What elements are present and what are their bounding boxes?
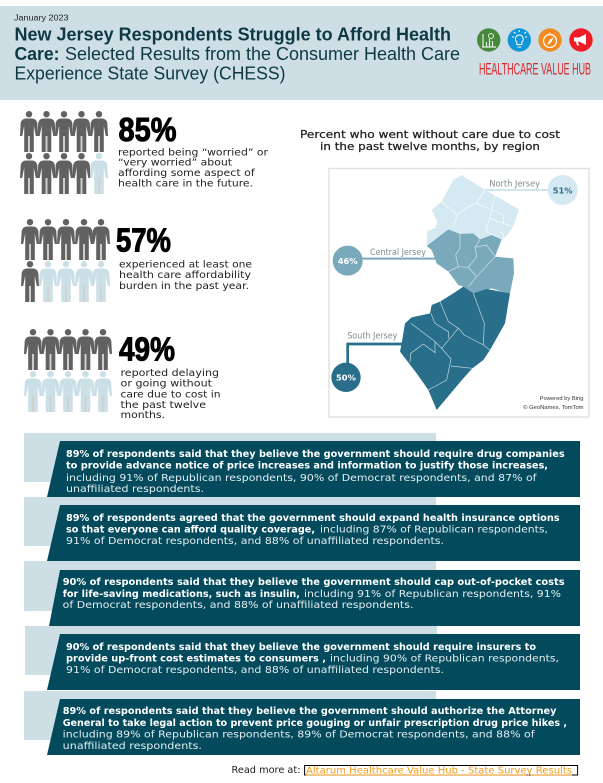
description: [119, 260, 252, 292]
panel: 49 percent stat: [24, 329, 220, 421]
description: “very worried” about: [118, 158, 232, 169]
icon: megaphone: [569, 28, 593, 52]
panel: 85 percent stat: [20, 111, 269, 194]
description: [118, 148, 269, 190]
panel: cost estimates finding: 91% of Democrat respondents, and 88% of unaffiliated respondents.: [66, 665, 444, 676]
panel: drug price notice finding: including 91% of Republican respondents, 90% of Democrat respondents, and 87% of: [66, 473, 537, 484]
description: [120, 368, 220, 421]
description: experienced at least one: [119, 260, 252, 271]
map heading: Percent who went without care due to cost: [300, 128, 561, 141]
title: Selected Results from the Consumer Health Care: [65, 43, 460, 64]
description: health care affordability: [119, 270, 251, 281]
map region: North Jersey: [427, 175, 519, 246]
map attribution: Powered by Bing: [540, 396, 584, 402]
panel: expand coverage finding: so that everyone can afford quality coverage,: [66, 525, 315, 536]
pictogram: 9 of 10 people: [20, 111, 108, 194]
panel: expand coverage finding: 91% of Democrat respondents, and 88% of unaffiliated respondents.: [66, 536, 444, 547]
read more link: Read more at:: [232, 765, 300, 776]
panel: expand coverage finding: including 87% of Republican respondents,: [320, 525, 548, 536]
map attribution: [523, 396, 584, 411]
panel: drug price notice finding: unaffiliated respondents.: [66, 484, 204, 495]
panel: insulin cost cap finding: for life-saving medications, such as insulin,: [63, 589, 300, 600]
panel: insulin cost cap finding: 90% of respondents said that they believe the government should cap out-of-pocket costs: [63, 577, 565, 588]
description: burden in the past year.: [119, 281, 249, 292]
map region: Central Jersey: [427, 229, 514, 294]
callout: North Jersey 51%: North Jersey: [489, 180, 540, 190]
date: January 2023: [14, 14, 69, 22]
callout: South Jersey 50%: 50%: [336, 373, 357, 383]
panel: drug price notice finding: to provide advance notice of price increases and information to justify those increases,: [66, 460, 548, 472]
callout: Central Jersey 46%: 46%: [338, 256, 358, 266]
callout: South Jersey 50%: South Jersey: [347, 332, 397, 342]
panel: insulin cost cap finding: including 91% of Republican respondents, 91%: [304, 589, 561, 600]
description: health care in the future.: [118, 179, 253, 190]
title: Care:: [14, 43, 60, 64]
description: care due to cost in: [120, 389, 220, 400]
callout: Central Jersey 46%: [333, 246, 437, 276]
description: the past twelve: [120, 400, 206, 411]
description: reported delaying: [120, 368, 219, 379]
description: affording some aspect of: [118, 168, 255, 179]
panel: price gouging finding: [24, 691, 580, 755]
panel: price gouging finding: including 89% of Republican respondents, 89% of Democrat respondents, and 88% of: [63, 730, 535, 741]
read more link: [232, 765, 578, 776]
panel: price gouging finding: General to take legal action to prevent price gouging or unfair prescription drug price hikes ,: [63, 718, 567, 729]
map attribution: © GeoNames, TomTom: [523, 404, 584, 411]
panel: expand coverage finding: [24, 497, 580, 561]
callout: South Jersey 50%: [331, 332, 403, 392]
map heading: [300, 128, 561, 153]
title: [14, 24, 460, 83]
panel: insulin cost cap finding: of Democrat respondents, and 88% of unaffiliated respondents.: [63, 600, 414, 611]
panel: cost estimates finding: [25, 626, 580, 690]
header band: [0, 6, 603, 100]
read more link: Altarum Healthcare Value Hub - State Survey Results: [306, 766, 572, 776]
panel: New Jersey region map: [329, 168, 589, 417]
figure: 85%: 85%: [118, 111, 176, 148]
map heading: in the past twelve months, by region: [320, 140, 540, 153]
callout: Central Jersey 46%: Central Jersey: [370, 248, 426, 258]
panel: cost estimates finding: provide up-front cost estimates to consumers ,: [66, 654, 326, 665]
figure: 57%: 57%: [116, 222, 171, 259]
title: New Jersey Respondents Struggle to Afford Health: [14, 24, 451, 45]
icon: light bulb: [508, 28, 531, 52]
panel: drug price notice finding: 89% of respondents said that they believe the government should require drug companies: [66, 449, 565, 460]
panel: cost estimates finding: 90% of respondents said that they believe the government should require insurers to: [66, 642, 536, 653]
title: Experience State Survey (CHESS): [14, 62, 286, 83]
panel: drug price notice finding: [24, 433, 580, 497]
panel: insulin cost cap finding: [24, 561, 580, 626]
callout: North Jersey 51%: 51%: [553, 185, 573, 195]
panel: cost estimates finding: including 90% of Republican respondents,: [330, 654, 559, 665]
description: reported being “worried” or: [118, 148, 269, 159]
description: or going without: [120, 379, 212, 390]
panel: expand coverage finding: 89% of respondents agreed that the government should expand health insurance options: [66, 513, 560, 524]
panel: price gouging finding: unaffiliated respondents.: [63, 741, 202, 752]
callout: North Jersey 51%: [485, 175, 578, 205]
icon: compass: [538, 28, 562, 52]
logo: Healthcare Value Hub: [477, 28, 593, 78]
pictogram: 6 of 10 people: [21, 219, 110, 302]
description: months.: [120, 410, 165, 421]
map region: South Jersey: [400, 287, 510, 410]
figure: 49%: 49%: [119, 331, 175, 368]
panel: 57 percent stat: [21, 219, 252, 302]
icon: chart: [477, 28, 500, 52]
panel: price gouging finding: 89% of respondents said that they believe the government should authorize the Attorney: [63, 706, 557, 717]
pictogram: 5 of 10 people: [24, 329, 112, 412]
